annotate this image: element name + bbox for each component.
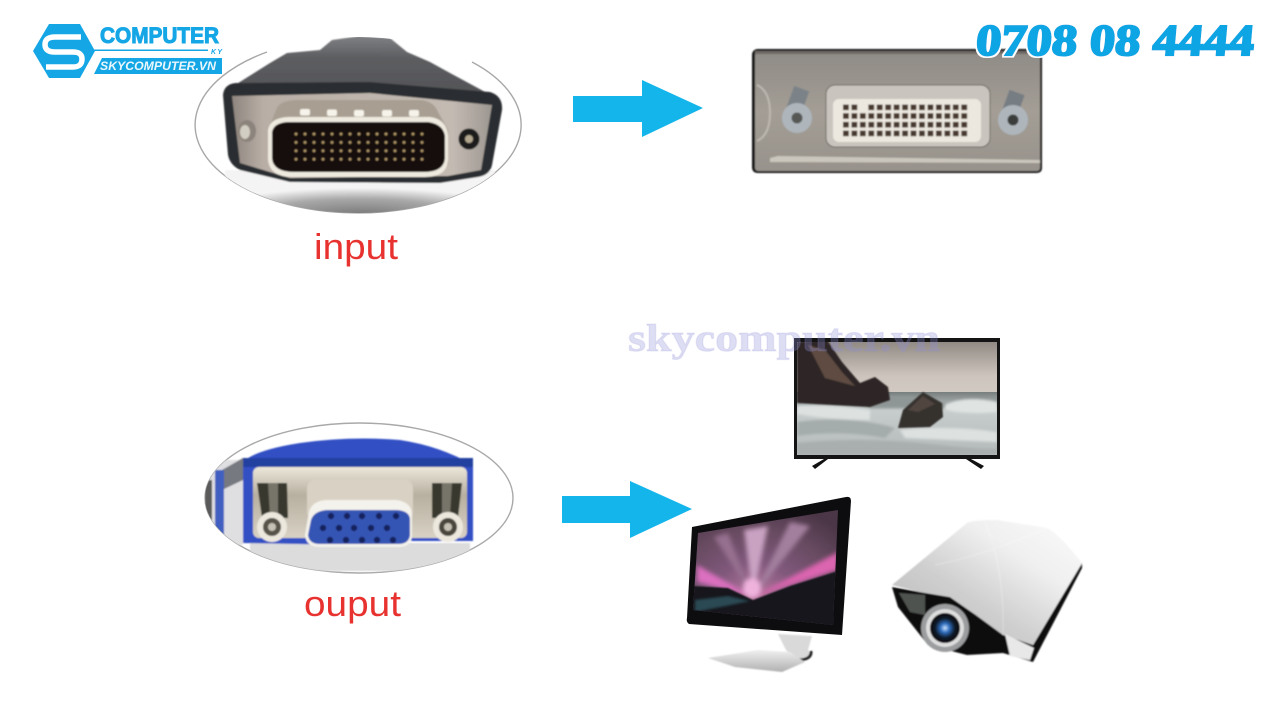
photo: output VGA connector in ellipse	[205, 423, 513, 573]
icon: television	[794, 338, 1002, 469]
watermark: skycomputer.vn	[628, 317, 940, 360]
label: input: input	[314, 226, 398, 267]
logo wordmark: COMPUTER	[100, 23, 219, 48]
logo: KY	[211, 49, 223, 56]
monitor body	[687, 497, 851, 635]
logo hexagon icon	[33, 24, 95, 78]
icon: projector	[892, 520, 1082, 662]
arrow: input to DVI port	[573, 80, 703, 137]
photo: input connector in ellipse	[195, 36, 521, 215]
phone number: 0708 08 4444	[974, 16, 1256, 65]
label: output: ouput	[304, 583, 401, 624]
arrow: output to displays	[562, 481, 692, 538]
monitor stand	[708, 634, 812, 672]
logo web address band	[94, 58, 222, 74]
logo: SKYCOMPUTER.VN	[100, 61, 217, 73]
logo	[33, 23, 223, 78]
icon: desktop monitor	[687, 497, 851, 672]
photo: DVI port plate	[752, 49, 1042, 173]
